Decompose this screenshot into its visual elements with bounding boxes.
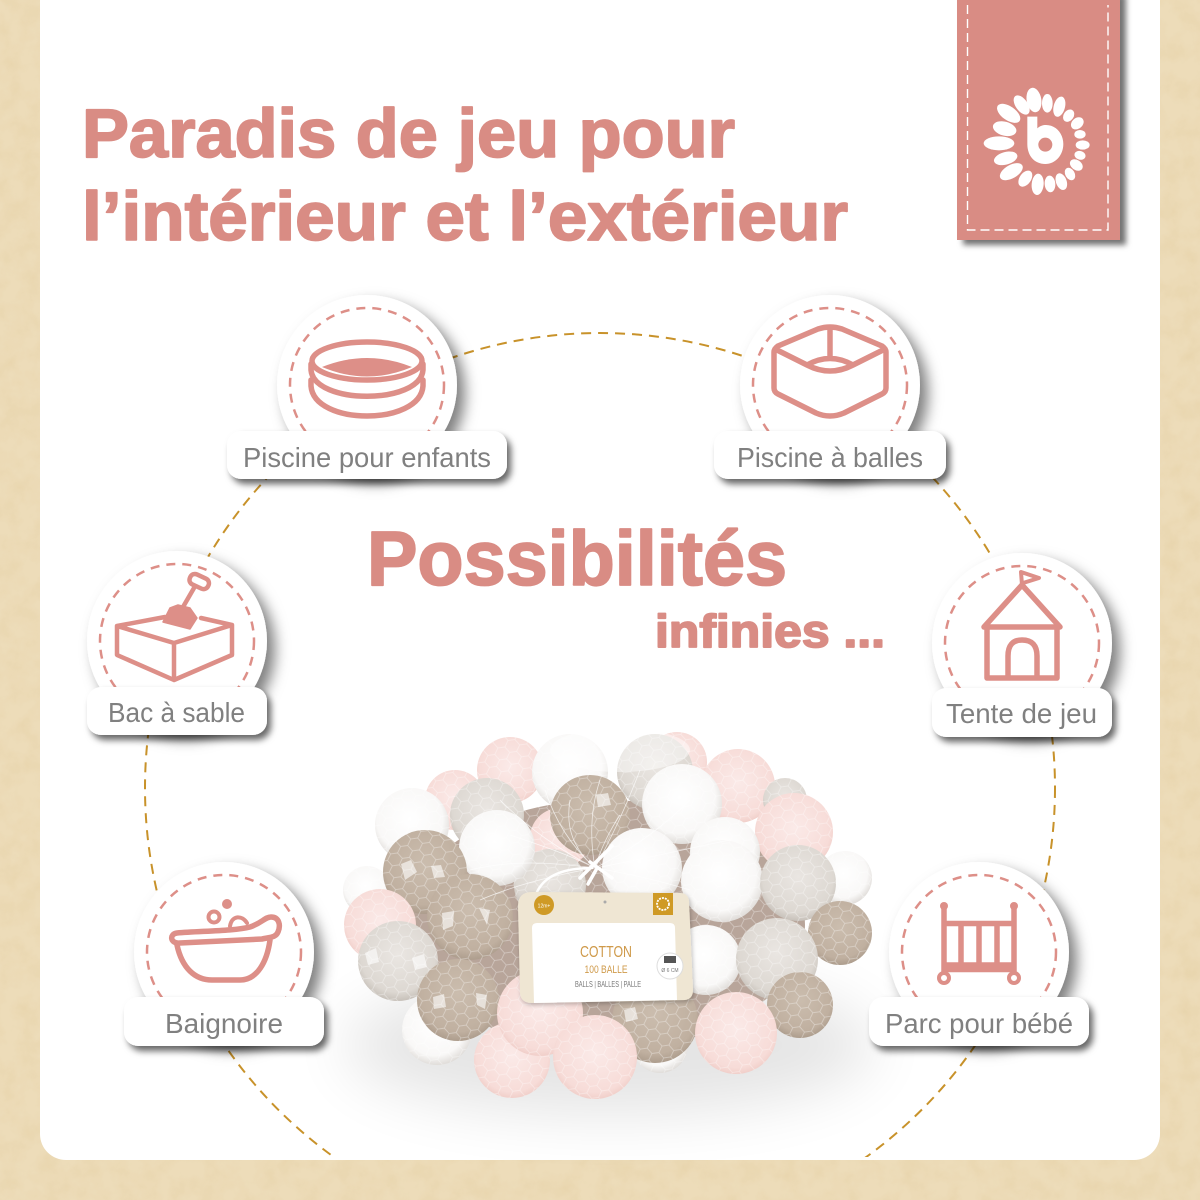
icon: play tent [984,572,1060,678]
centre heading: Possibilités [367,516,787,602]
use: Baignoire [124,862,324,1046]
use: Tente de jeu [932,553,1112,737]
use: Parc pour bébé [869,862,1089,1046]
product card label: COTTON [580,944,632,961]
use: Bac à sable: Bac à sable [108,697,245,728]
icon: paddling pool [311,342,423,416]
icon: sandbox with shovel [117,572,232,680]
product photo: bag of balls [330,720,880,1120]
title: l’intérieur et l’extérieur [82,178,848,255]
use: Piscine à balles: Piscine à balles [737,442,923,473]
net over balls [344,732,872,1099]
centre heading [367,516,885,657]
use: Tente de jeu: Tente de jeu [946,698,1097,729]
use: Baignoire: Baignoire [165,1008,283,1039]
balls [343,732,872,1099]
use: Bac à sable [87,551,267,735]
product card label: Ø 6 CM [661,968,679,974]
icon: brand flower logo [984,87,1090,195]
centre heading: infinies ... [655,605,885,657]
net knot [537,846,612,892]
product card label [518,892,693,1003]
product card label: BALLS | BALLES | PALLE [575,980,641,989]
product card label: 100 BALLE [584,964,628,976]
product card label: 12m+ [538,904,550,910]
brand tag [957,0,1120,240]
use: Piscine pour enfants: Piscine pour enfants [243,442,491,473]
title [82,95,848,255]
use: Parc pour bébé: Parc pour bébé [885,1008,1073,1039]
icon: ball pit box [774,327,886,416]
dashed ring connecting the uses [145,333,1055,1200]
use: Piscine à balles [714,295,946,479]
title: Paradis de jeu pour [82,95,735,172]
use: Piscine pour enfants [227,295,507,479]
icon: baby bath [172,899,279,980]
icon: baby crib [939,902,1019,983]
